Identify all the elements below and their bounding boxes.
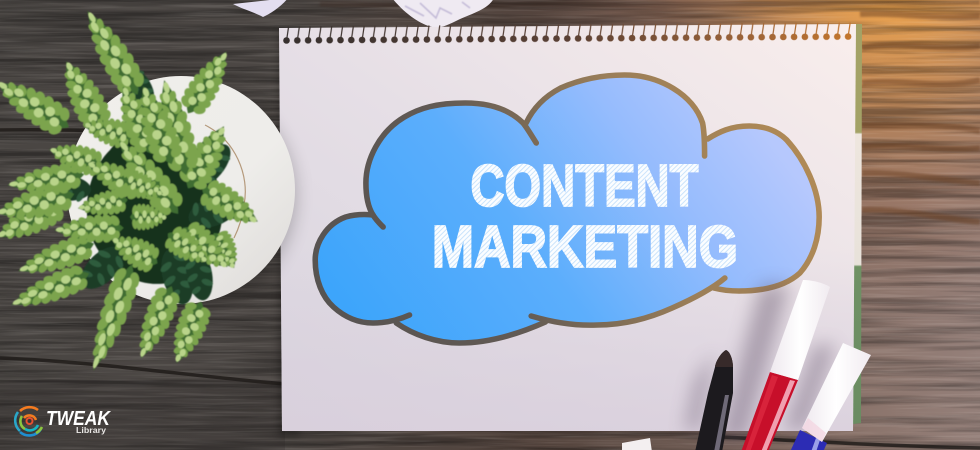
cloud fill [315,75,819,343]
logo wordmark: TWEAK [46,408,111,430]
notebook [279,18,862,436]
plant pot [67,76,295,310]
notebook page [279,24,856,431]
crumpled paper, centre [392,0,494,28]
notebook shadow [279,30,300,436]
small white cap [622,438,652,450]
cloud heading: CONTENT [470,152,699,219]
plant [0,2,267,376]
crumpled paper, left [233,0,288,17]
red marker [741,280,830,450]
black marker [695,350,733,450]
spiral binding [283,22,852,44]
blue marker [790,343,871,450]
logo icon [15,407,42,435]
cloud heading [432,152,738,280]
cloud outline [315,75,819,343]
marker shadows [685,285,835,440]
cloud heading: MARKETING [432,213,738,280]
plant dark foliage [38,63,244,309]
logo sub-label: Library [76,425,106,435]
plant dark centre [87,130,223,284]
notebook back cover strip [846,24,862,425]
content marketing cloud [315,75,819,343]
logo: Tweak Library [15,407,111,435]
plant leaves [0,2,267,376]
